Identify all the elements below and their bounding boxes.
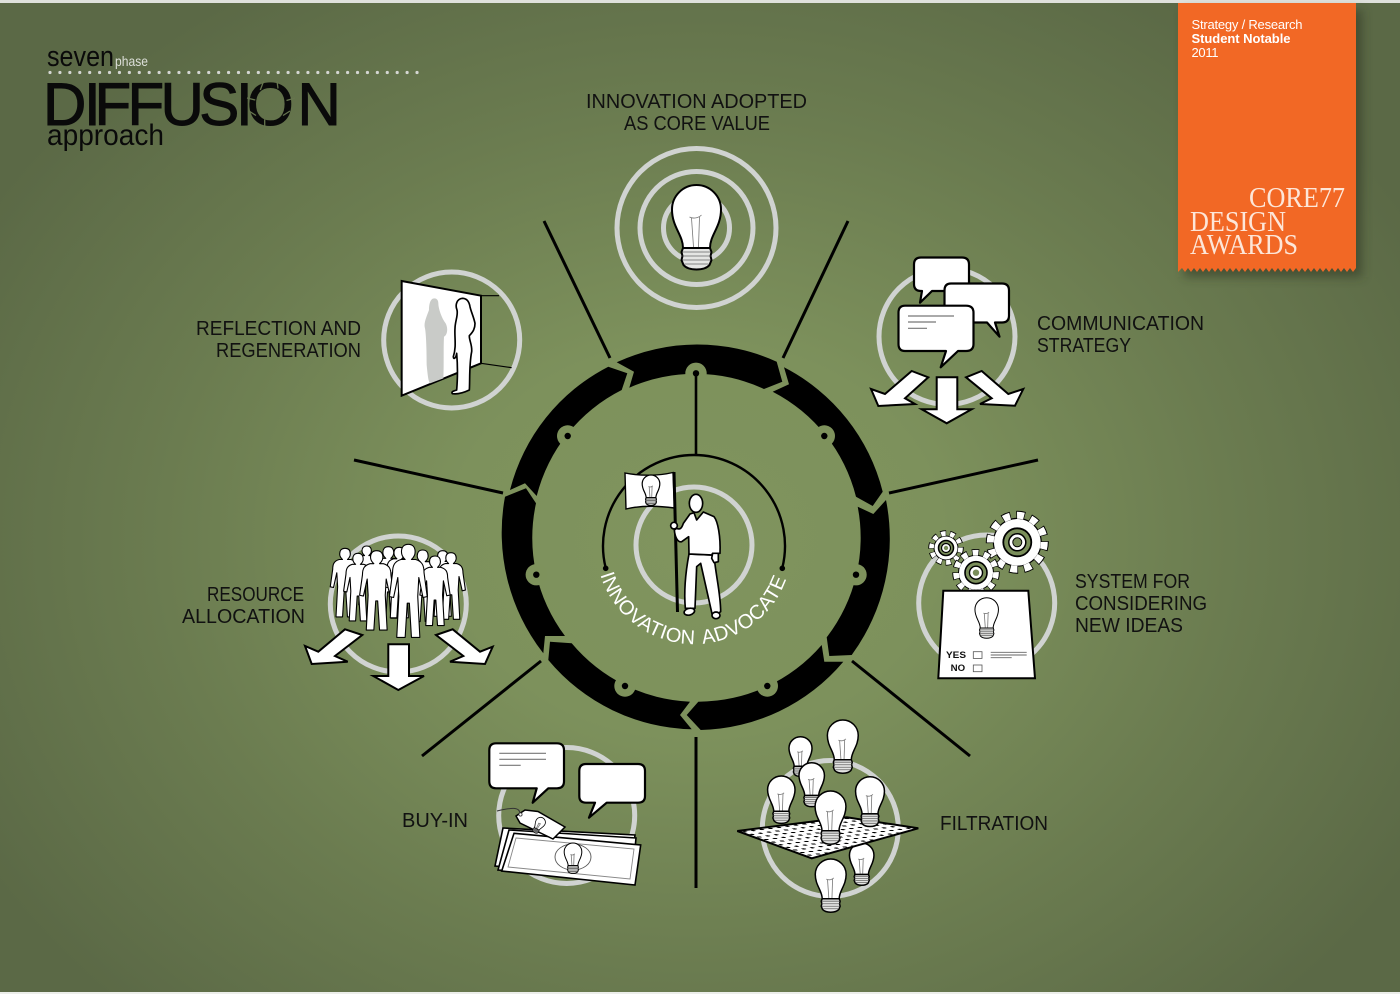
phase: reflection and regeneration <box>196 272 520 408</box>
arrow <box>871 371 928 406</box>
central arrow ring <box>502 345 890 730</box>
connector arc <box>603 455 785 568</box>
speech bubble <box>944 284 1009 337</box>
speech bubble <box>898 306 974 367</box>
icon: small gear <box>932 534 960 562</box>
heading: SYSTEM FOR <box>1075 571 1190 593</box>
phase: resource allocation: ALLOCATION <box>182 606 305 628</box>
advocate figure <box>671 494 721 619</box>
title block <box>43 41 420 152</box>
title: DIFFUSION: DIFFUSION <box>43 71 341 138</box>
phase: system for considering new ideas: CONSIDERING <box>1075 593 1207 615</box>
crowd of people <box>330 544 465 637</box>
heading: FILTRATION <box>940 813 1048 835</box>
connector line <box>695 373 697 455</box>
arrow <box>966 371 1023 406</box>
speech bubble <box>579 764 645 818</box>
flag <box>625 472 674 509</box>
icon: form bulb <box>975 598 998 638</box>
icon: large bulb <box>672 185 721 270</box>
phase: filtration <box>737 720 1048 912</box>
icon: bulbs passing filter <box>815 777 884 912</box>
price tag <box>497 808 565 839</box>
heading: RESOURCE <box>207 584 304 606</box>
form sheet <box>938 591 1035 678</box>
heading: BUY-IN <box>402 810 468 832</box>
icon: flag bulb <box>642 475 660 505</box>
tag text: year: 2011 <box>1192 45 1218 60</box>
centre: innovation advocate <box>600 376 786 644</box>
curved label: INNOVATION ADVOCATE <box>600 572 786 644</box>
icon: banknote bulb <box>564 843 582 873</box>
phase: communication strategy: STRATEGY <box>1037 335 1131 357</box>
arrow <box>436 629 493 664</box>
banknotes <box>495 828 641 885</box>
phase: resource allocation <box>182 536 493 690</box>
form yes label: YES <box>946 650 966 660</box>
grey circle <box>636 487 752 603</box>
tag logo: AWARDS <box>1190 230 1298 261</box>
arrow <box>373 644 424 690</box>
tag logo <box>1190 183 1345 261</box>
heading: REFLECTION AND <box>196 318 361 340</box>
speech bubble <box>914 258 969 303</box>
phase: communication strategy <box>871 258 1204 423</box>
tag text: award: Student Notable <box>1192 31 1290 46</box>
tag body <box>1178 3 1356 272</box>
tag text: category: Strategy / Research <box>1192 17 1302 32</box>
icon: large gear <box>990 515 1044 569</box>
phase: innovation adopted: AS CORE VALUE <box>624 113 770 135</box>
title: approach: approach <box>47 119 164 152</box>
reflection silhouette <box>425 298 447 383</box>
perforated filter <box>737 817 918 858</box>
mirror wall <box>402 281 481 396</box>
flag pole <box>674 472 678 612</box>
woman figure <box>452 298 475 394</box>
award tag <box>1178 3 1362 277</box>
tag logo: CORE77 <box>1249 183 1345 214</box>
title: seven: seven <box>47 41 114 73</box>
icon: medium gear <box>956 553 996 593</box>
heading: INNOVATION ADOPTED <box>586 91 807 113</box>
title: phase: phase <box>115 53 148 69</box>
arrow <box>922 377 972 423</box>
speech bubble <box>489 743 564 803</box>
icon: bulbs above filter <box>768 720 874 885</box>
heading: COMMUNICATION <box>1037 313 1204 335</box>
phase: reflection and regeneration: REGENERATION <box>216 340 361 362</box>
ring nodes <box>526 363 867 697</box>
phase: system for considering new ideas: NEW IDEAS <box>1075 615 1183 637</box>
phase: system for considering new ideas <box>919 515 1207 678</box>
form no label: NO <box>951 663 965 673</box>
phase: innovation adopted <box>586 91 807 308</box>
radial divider lines <box>354 221 1038 888</box>
tag logo: DESIGN <box>1190 207 1286 238</box>
tag shadow <box>1184 10 1362 277</box>
arrow <box>305 629 362 664</box>
phase: buy-in <box>402 743 645 885</box>
